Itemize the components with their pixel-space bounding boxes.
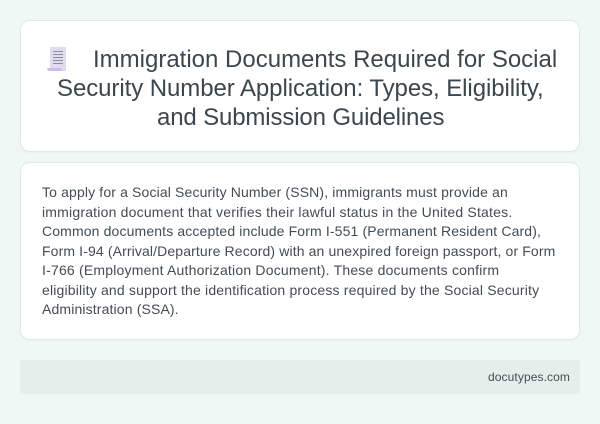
title [57, 46, 557, 131]
text block: description [42, 184, 555, 317]
text block: description: eligibility and support the identification process required by the Social Security [42, 282, 539, 298]
text block: description: Common documents accepted include Form I-551 (Permanent Resident Card), [42, 223, 541, 239]
footer text: docutypes.com: docutypes.com [488, 370, 570, 384]
title: and Submission Guidelines [157, 104, 444, 131]
text block: description: I-766 (Employment Authorization Document). These documents confirm [42, 262, 499, 278]
text block: description: To apply for a Social Security Number (SSN), immigrants must provide an [42, 184, 508, 200]
title: Immigration Documents Required for Social [93, 46, 557, 73]
panel: title card [20, 20, 580, 152]
footer bar [20, 360, 580, 394]
text block: description: immigration document that verifies their lawful status in the United States. [42, 204, 512, 220]
panel: description card [20, 162, 580, 340]
text block: description: Form I-94 (Arrival/Departure Record) with an unexpired foreign passport, or Form [42, 242, 555, 258]
text block: description: Administration (SSA). [42, 301, 179, 317]
title: Security Number Application: Types, Eligibility, [57, 75, 544, 102]
icon: document scroll [47, 47, 66, 71]
